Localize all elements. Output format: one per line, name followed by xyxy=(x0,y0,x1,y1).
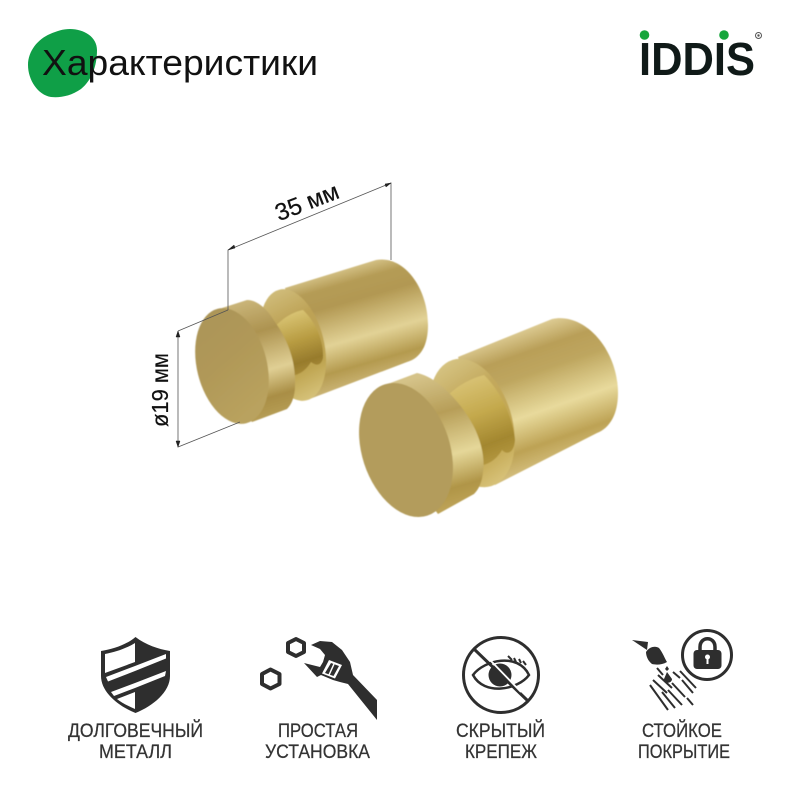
feature: durable coating xyxy=(632,630,732,763)
title: Характеристики xyxy=(42,42,318,83)
feature: hidden fastener xyxy=(456,638,545,763)
label: СКРЫТЫЙ xyxy=(456,720,545,742)
feature: durable metal xyxy=(68,637,203,763)
green blob xyxy=(28,29,97,97)
icon: lock badge xyxy=(682,630,732,680)
left hook with dimensions xyxy=(147,178,428,447)
dimension 35 mm: 35 мм xyxy=(271,178,343,227)
label xyxy=(265,721,370,763)
feature: durable metal: МЕТАЛЛ xyxy=(99,742,172,763)
recessed ring face xyxy=(249,282,337,408)
big cylinder xyxy=(285,259,428,400)
icon: nuts xyxy=(262,639,304,688)
icon: wrench xyxy=(304,641,377,720)
front face xyxy=(184,300,280,432)
feature: hidden fastener: КРЕПЕЖ xyxy=(465,742,537,763)
cap cylinder xyxy=(385,373,484,514)
logo: IDDIS: IDDIS xyxy=(639,33,755,85)
label: ПРОСТАЯ xyxy=(278,721,358,742)
recessed ring face xyxy=(414,348,530,498)
feature: easy install xyxy=(262,639,377,763)
hook body xyxy=(184,259,428,432)
feature: durable coating: ПОКРЫТИЕ xyxy=(638,742,730,763)
label: СТОЙКОЕ xyxy=(642,720,722,742)
label: ДОЛГОВЕЧНЫЙ xyxy=(68,720,203,742)
icon: crossed-out eye xyxy=(464,638,538,712)
dimension 19 mm: ø19 мм xyxy=(147,353,173,427)
front face xyxy=(343,371,469,529)
cap cylinder xyxy=(222,300,295,422)
right hook xyxy=(343,318,618,529)
label: УСТАНОВКА xyxy=(265,742,370,763)
neck xyxy=(448,375,515,466)
icon: shield xyxy=(101,637,170,713)
dimension lines xyxy=(178,183,391,447)
big cylinder xyxy=(458,318,618,485)
icon: brush and streaks xyxy=(632,640,696,710)
neck xyxy=(272,310,323,376)
